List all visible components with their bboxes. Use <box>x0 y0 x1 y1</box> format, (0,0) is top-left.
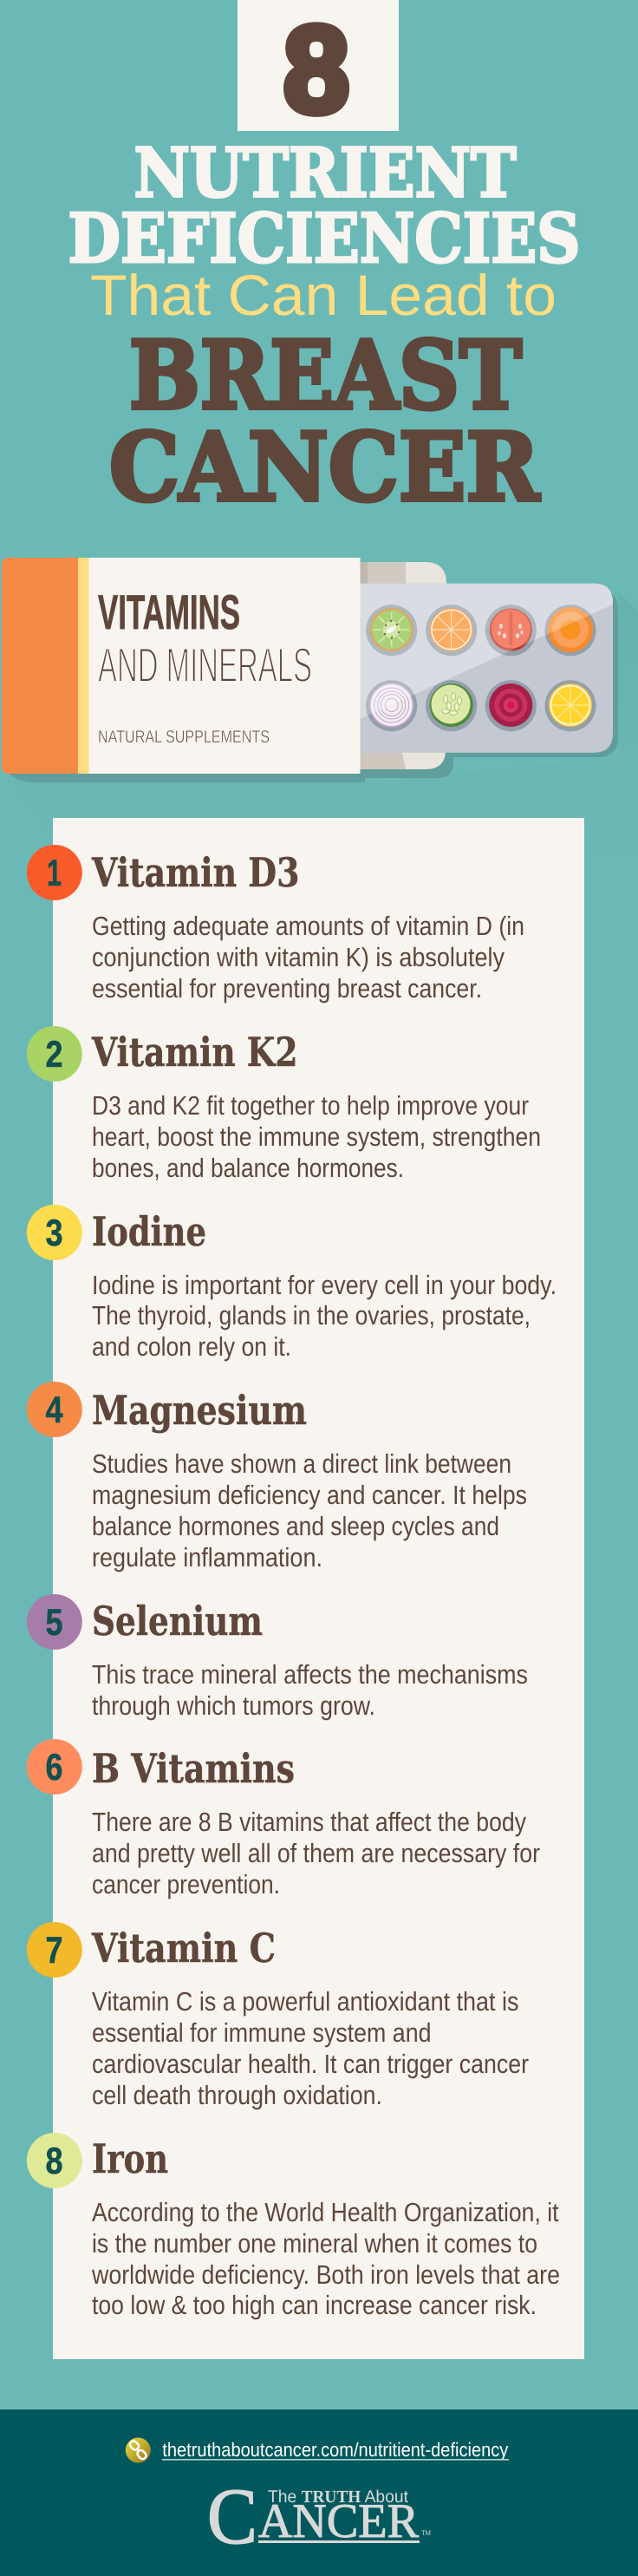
nutrient 2: vitamin K2 <box>27 1026 541 1183</box>
heading 4: Magnesium <box>92 1387 307 1434</box>
body 6 <box>92 1808 540 1899</box>
badge 1 <box>27 845 82 900</box>
body 8 <box>91 2198 560 2320</box>
link text: thetruthaboutcancer.com/nutritient-deficiency <box>162 2439 509 2461</box>
title <box>68 0 581 522</box>
heading 2: Vitamin K2 <box>91 1029 297 1076</box>
body 8: According to the World Health Organization, it <box>92 2198 559 2227</box>
box <box>2 558 361 774</box>
badge 3: 3 <box>45 1213 62 1254</box>
body 5: through which tumors grow. <box>92 1691 375 1721</box>
heading 5: Selenium <box>92 1598 263 1644</box>
shadows <box>8 590 618 782</box>
illustration: vitamin blister pack and box <box>2 558 618 782</box>
pill: orange <box>426 605 477 656</box>
nutrient 8: iron <box>27 2133 560 2320</box>
body 8: is the number one mineral when it comes to <box>92 2229 537 2259</box>
body 7: essential for immune system and <box>92 2018 432 2048</box>
logo: the truth about cancer: TM <box>421 2529 431 2537</box>
body 6: cancer prevention. <box>92 1870 280 1899</box>
body 4: balance hormones and sleep cycles and <box>92 1512 499 1541</box>
heading: breast: BREAST <box>129 321 522 430</box>
body 6: and pretty well all of them are necessary for <box>92 1839 540 1868</box>
logo: the truth about cancer: C <box>207 2472 257 2560</box>
blister sheet <box>360 584 613 753</box>
nutrient 1: vitamin D3 <box>27 845 524 1004</box>
body 3: Iodine is important for every cell in your body. <box>92 1271 557 1300</box>
icon: link <box>126 2437 151 2463</box>
heading: deficiencies: DEFICIENCIES <box>68 199 581 278</box>
body 3: The thyroid, glands in the ovaries, prostate, <box>92 1301 531 1330</box>
badge 5: 5 <box>45 1602 62 1644</box>
body 7 <box>92 1987 529 2110</box>
body 2: D3 and K2 fit together to help improve your <box>92 1091 529 1121</box>
badge 4 <box>27 1382 82 1437</box>
box label: vitamins: VITAMINS <box>98 585 240 639</box>
number box: 8 <box>283 1 349 139</box>
badge 5 <box>27 1594 82 1650</box>
body 2: bones, and balance hormones. <box>92 1154 404 1183</box>
body 6: There are 8 B vitamins that affect the body <box>92 1808 527 1837</box>
nutrient 6: B vitamins <box>27 1739 540 1899</box>
pill: carrot <box>544 605 596 656</box>
body 1: conjunction with vitamin K) is absolutely <box>92 943 505 972</box>
body 3: and colon rely on it. <box>92 1332 291 1362</box>
pill: beet <box>485 680 537 731</box>
heading 6: B Vitamins <box>92 1745 295 1792</box>
heading 3: Iodine <box>92 1208 206 1255</box>
heading 1: Vitamin D3 <box>91 849 300 896</box>
pill: tomato <box>485 605 537 656</box>
badge 7: 7 <box>45 1930 62 1971</box>
badge 6 <box>27 1739 82 1795</box>
pill: onion <box>366 680 417 731</box>
body 7: cardiovascular health. It can trigger cancer <box>92 2050 529 2079</box>
nutrient 3: iodine <box>27 1205 557 1362</box>
badge 2: 2 <box>45 1034 62 1076</box>
badge 2 <box>27 1026 82 1082</box>
badge 7 <box>27 1922 82 1978</box>
number box <box>238 0 399 139</box>
pill: cucumber <box>426 680 477 731</box>
body 4 <box>92 1449 527 1572</box>
badge 6: 6 <box>45 1747 62 1788</box>
body 1: essential for preventing breast cancer. <box>92 974 482 1004</box>
body 1: Getting adequate amounts of vitamin D (in <box>92 912 524 941</box>
pill: lemon <box>544 680 596 731</box>
inner tray <box>360 562 446 769</box>
body 8: worldwide deficiency. Both iron levels that are <box>91 2260 560 2290</box>
heading 7: Vitamin C <box>91 1925 276 1971</box>
heading: cancer: CANCER <box>109 413 540 522</box>
badge 4: 4 <box>45 1389 63 1431</box>
pill: kiwi <box>366 605 417 656</box>
logo: the truth about cancer: ANCER <box>258 2494 420 2548</box>
nutrient 7: vitamin C <box>27 1922 529 2110</box>
body 3 <box>92 1271 557 1362</box>
body 4: regulate inflammation. <box>92 1543 322 1572</box>
body 8: too low & too high can increase cancer risk. <box>92 2291 537 2320</box>
logo: the truth about cancer <box>207 2472 431 2560</box>
heading: nutrient: NUTRIENT <box>133 134 517 213</box>
nutrient 4: magnesium <box>27 1382 527 1572</box>
badge 8 <box>27 2133 82 2188</box>
box label: and minerals: AND MINERALS <box>98 637 312 692</box>
body 1 <box>92 912 524 1004</box>
nutrient 5: selenium <box>27 1594 528 1721</box>
heading: that can lead to: That Can Lead to <box>90 263 557 327</box>
body 5 <box>92 1660 528 1721</box>
body 5: This trace mineral affects the mechanisms <box>92 1660 528 1690</box>
body 4: magnesium deficiency and cancer. It helps <box>92 1481 527 1510</box>
panel: nutrient list <box>27 818 584 2359</box>
heading 8: Iron <box>92 2135 168 2182</box>
badge 8: 8 <box>45 2141 62 2182</box>
footer <box>0 2409 638 2576</box>
body 7: cell death through oxidation. <box>92 2081 382 2110</box>
body 2: heart, boost the immune system, strengthen <box>92 1122 541 1152</box>
badge 1: 1 <box>47 853 62 894</box>
badge 3 <box>27 1205 82 1260</box>
body 2 <box>92 1091 541 1183</box>
body 4: Studies have shown a direct link between <box>92 1449 511 1479</box>
box label: natural supplements: NATURAL SUPPLEMENTS <box>98 728 270 747</box>
logo: the truth about cancer: The TRUTH About <box>268 2488 408 2507</box>
body 7: Vitamin C is a powerful antioxidant that is <box>92 1987 518 2017</box>
